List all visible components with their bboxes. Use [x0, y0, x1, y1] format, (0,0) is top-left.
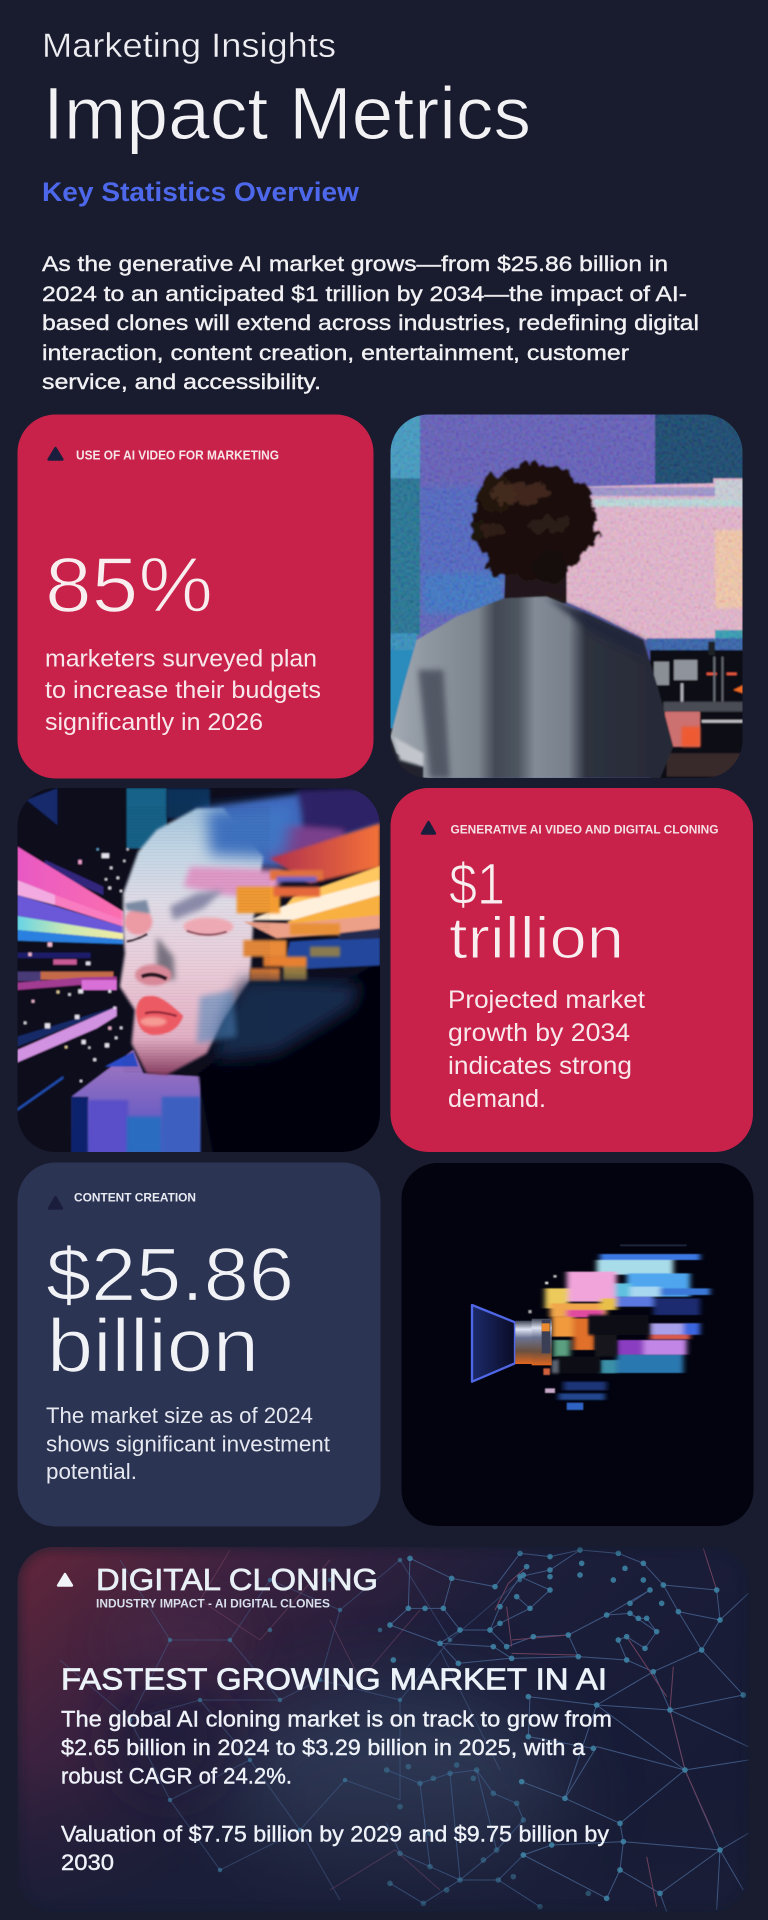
neck	[504, 567, 567, 603]
dark lower left corner	[390, 728, 428, 778]
body text	[61, 1707, 612, 1875]
stat description	[45, 646, 321, 736]
edge darkening	[18, 1547, 748, 1912]
lower blue tail	[528, 1245, 687, 1410]
stat: $1 trillion: $1	[449, 852, 505, 917]
stat: $1 trillion	[449, 852, 624, 971]
panel: generative AI video and digital cloning	[390, 788, 753, 1152]
panel: digital cloning with network background	[18, 1547, 748, 1912]
tag label: USE OF AI VIDEO FOR MARKETING	[76, 448, 279, 462]
subtitle: Key Statistics Overview: Key Statistics Overview	[42, 177, 360, 207]
shirt	[391, 597, 673, 778]
intro paragraph: interaction, content creation, entertainment, customer	[42, 340, 629, 365]
patchy screen tones	[420, 462, 579, 616]
dark neck and lower right	[198, 960, 383, 1153]
eyebrow: Marketing Insights: Marketing Insights	[42, 27, 336, 65]
lips	[136, 996, 183, 1035]
right light rays	[243, 823, 380, 970]
lens barrel	[515, 1321, 535, 1364]
glitch colour cloud	[545, 1254, 710, 1373]
dissolving dark blue noise	[217, 980, 360, 1060]
black data blocks	[552, 1315, 648, 1373]
pixel particles	[24, 848, 129, 1082]
image: glitching female face with light rays	[10, 780, 390, 1160]
tag label: GENERATIVE AI VIDEO AND DIGITAL CLONING	[450, 822, 718, 836]
facial features	[124, 890, 233, 1035]
left colour streaks	[17, 847, 123, 1111]
body text: robust CAGR of 24.2%.	[61, 1763, 292, 1788]
hair	[470, 464, 600, 583]
camera hood	[472, 1305, 515, 1382]
upper head colour	[197, 787, 383, 867]
face	[120, 808, 263, 1075]
icon: triangle marker	[49, 1197, 62, 1208]
stat description: shows significant investment	[46, 1432, 331, 1456]
intro paragraph: 2024 to an anticipated $1 trillion by 2034—the impact of AI-	[42, 281, 687, 306]
stat: $25.86 billion: $25.86	[46, 1232, 294, 1316]
intro paragraph: service, and accessibility.	[42, 369, 321, 394]
image: man from behind facing a pixelated screen	[380, 410, 750, 783]
mixing console	[650, 642, 750, 783]
network mesh: pinkish links on left	[200, 1550, 440, 1890]
icon: triangle marker	[422, 822, 435, 834]
tag label: CONTENT CREATION	[74, 1191, 196, 1205]
heading: fastest growing market: FASTEST GROWING MARKET IN AI	[61, 1661, 607, 1696]
stat description: potential.	[46, 1459, 137, 1484]
panel: use of AI video for marketing	[18, 414, 374, 778]
body text: The global AI cloning market is on track to grow from	[61, 1707, 612, 1732]
image: dissolving film camera	[402, 1163, 754, 1526]
stat description: significantly in 2026	[45, 709, 263, 736]
title: Impact Metrics: Impact Metrics	[43, 72, 531, 155]
stat description: marketers surveyed plan	[45, 646, 317, 672]
bottom purple and blue blocks	[72, 1050, 200, 1153]
stat description: indicates strong	[448, 1052, 632, 1080]
stat description	[46, 1403, 331, 1484]
network nodes	[130, 1550, 743, 1907]
stat: $25.86 billion: billion	[47, 1304, 259, 1388]
stat description: to increase their budgets	[45, 677, 321, 704]
network mesh: blue links	[60, 1548, 748, 1912]
heading: DIGITAL CLONING: DIGITAL CLONING	[96, 1563, 378, 1597]
stat description: growth by 2034	[448, 1019, 630, 1047]
intro paragraph: based clones will extend across industries, redefining digital	[42, 310, 699, 335]
icon: white triangle marker	[58, 1574, 72, 1586]
bright pink screen area	[553, 478, 750, 650]
stat description: Projected market	[448, 986, 645, 1014]
stat description	[448, 986, 645, 1113]
intro paragraph: As the generative AI market grows—from $25.86 billion in	[42, 251, 668, 276]
stat: $25.86 billion	[46, 1232, 294, 1388]
blurred head silhouette	[225, 1690, 565, 1910]
face scan lines	[123, 807, 270, 1073]
orange glitch patches	[237, 870, 340, 981]
screen pixel grain	[387, 410, 750, 650]
subheading: industry impact: INDUSTRY IMPACT - AI DIGITAL CLONES	[96, 1596, 330, 1610]
header block	[42, 27, 531, 207]
intro paragraph	[42, 251, 699, 394]
body text: 2030	[61, 1850, 114, 1875]
stat: 85%: 85%	[45, 540, 213, 628]
top left blocks	[27, 788, 57, 825]
stat: $1 trillion: trillion	[449, 906, 624, 971]
stat description: demand.	[448, 1085, 546, 1113]
icon: triangle marker	[48, 448, 62, 460]
panel: content creation	[18, 1162, 380, 1526]
stat description: The market size as of 2024	[46, 1403, 313, 1428]
body text: Valuation of $7.75 billion by 2029 and $9.75 billion by	[61, 1822, 610, 1847]
body text: $2.65 billion in 2024 to $3.29 billion in 2025, with a	[61, 1735, 585, 1760]
